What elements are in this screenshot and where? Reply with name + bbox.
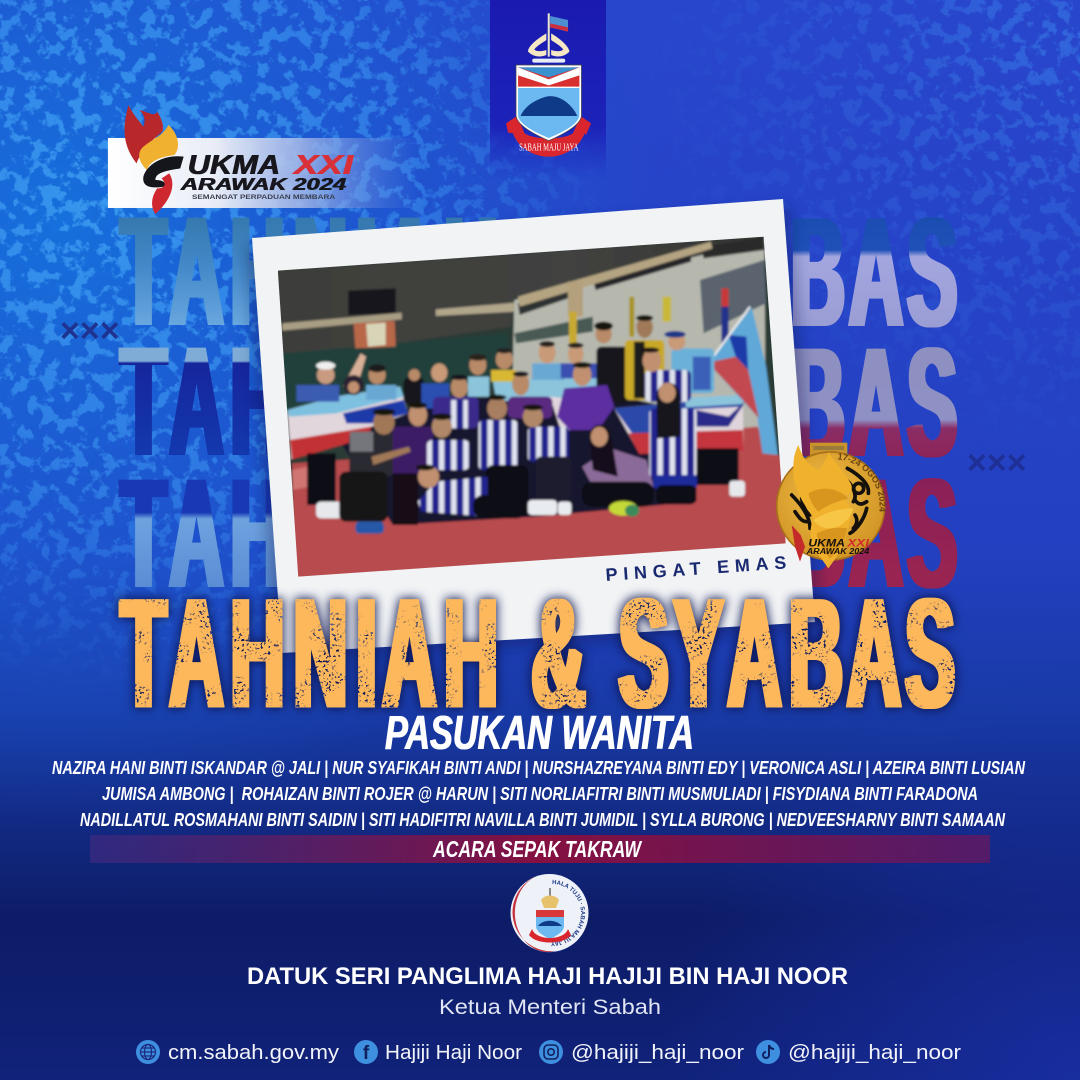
background repeated heading, row 1 — [121, 183, 957, 359]
event banner: ACARA SEPAK TAKRAW — [432, 836, 643, 862]
logo wordmark — [180, 149, 355, 194]
main heading — [121, 565, 955, 740]
tiktok handle: @hajiji_haji_noor — [788, 1042, 961, 1064]
background repeated heading, row 1: SYABAS — [619, 184, 957, 359]
logo wordmark: ARAWAK 2024 — [180, 173, 346, 194]
pole flag — [708, 307, 778, 455]
gold medal: XXI — [846, 538, 870, 550]
background repeated heading, row 2: SYABAS — [619, 314, 957, 489]
contact row — [136, 1040, 961, 1064]
gold medal: ARAWAK 2024 — [806, 547, 870, 556]
medal date: 17-24 OGOS 2024 — [838, 453, 886, 512]
team photo — [271, 233, 793, 583]
arena ceiling and stands — [278, 236, 780, 531]
background repeated heading, row 3: TAHNIAH — [121, 445, 498, 620]
main heading: SYABAS — [619, 565, 955, 740]
website: cm.sabah.gov.my — [168, 1042, 339, 1064]
background repeated heading, row 1: TAHNIAH — [121, 183, 498, 358]
medal flame — [793, 445, 852, 568]
middle row people — [433, 397, 479, 428]
photo frame — [246, 199, 822, 660]
logo wordmark: XXI — [291, 149, 355, 180]
main heading: & — [531, 565, 586, 740]
icon: tiktok — [756, 1040, 780, 1064]
SUKMA Sarawak 2024 logo: SEMANGAT PERPADUAN MEMBARA — [192, 194, 336, 201]
crouching man — [349, 432, 393, 477]
instagram handle: @hajiji_haji_noor — [571, 1042, 744, 1064]
main heading: TAHNIAH — [121, 565, 498, 740]
team subtitle: PASUKAN WANITA — [385, 707, 694, 760]
red court floor — [292, 427, 789, 580]
background repeated heading, row 2 — [121, 313, 957, 489]
background repeated heading, row 2: TAHNIAH — [121, 313, 498, 488]
decorative crosses right: ××× — [967, 444, 1027, 482]
purple crew — [392, 427, 433, 477]
torch flame — [125, 105, 163, 163]
Sabah state crest — [506, 13, 591, 157]
torch body — [139, 125, 178, 170]
Sabah state crest: SABAH MAJU JAYA — [519, 143, 579, 154]
right flag — [613, 404, 745, 444]
back row people — [296, 385, 339, 402]
middle flag — [491, 376, 598, 403]
medal tribal ornaments — [792, 468, 868, 533]
icon: instagram — [539, 1040, 563, 1064]
athlete names — [52, 757, 1025, 830]
icon: facebook: f — [363, 1043, 370, 1064]
front players — [427, 440, 470, 470]
chief minister title: Ketua Menteri Sabah — [439, 996, 661, 1019]
lying player — [418, 477, 487, 517]
Hala Tuju emblem: HALA TUJU · SABAH MAJU JAYA — [551, 880, 586, 946]
Pingat Emas caption: PINGAT EMAS — [605, 552, 787, 585]
gold medal: UKMA — [808, 538, 845, 550]
red swoosh — [152, 173, 172, 214]
chief minister name: DATUK SERI PANGLIMA HAJI HAJIJI BIN HAJI NOOR — [247, 963, 848, 990]
medal logo — [792, 525, 805, 562]
Hala Tuju emblem — [510, 874, 588, 952]
icon: globe — [136, 1040, 160, 1064]
standing legs left — [307, 453, 336, 505]
crowd shadow — [339, 393, 696, 525]
background repeated heading, row 3 — [121, 445, 957, 620]
seated hijab player — [582, 448, 654, 487]
top crest band — [490, 0, 606, 180]
background repeated heading, row 3: SYABAS — [619, 445, 957, 620]
icon: facebook — [354, 1040, 378, 1064]
gold medal — [776, 442, 886, 568]
left flag — [287, 387, 408, 459]
letter S of the logo — [143, 156, 184, 187]
event banner — [90, 835, 990, 863]
decorative crosses left: ××× — [60, 312, 120, 350]
logo wordmark: UKMA — [188, 149, 280, 180]
kneeling hijab player — [696, 448, 739, 485]
SUKMA Sarawak 2024 logo — [108, 105, 418, 214]
facebook name: Hajiji Haji Noor — [385, 1042, 522, 1064]
